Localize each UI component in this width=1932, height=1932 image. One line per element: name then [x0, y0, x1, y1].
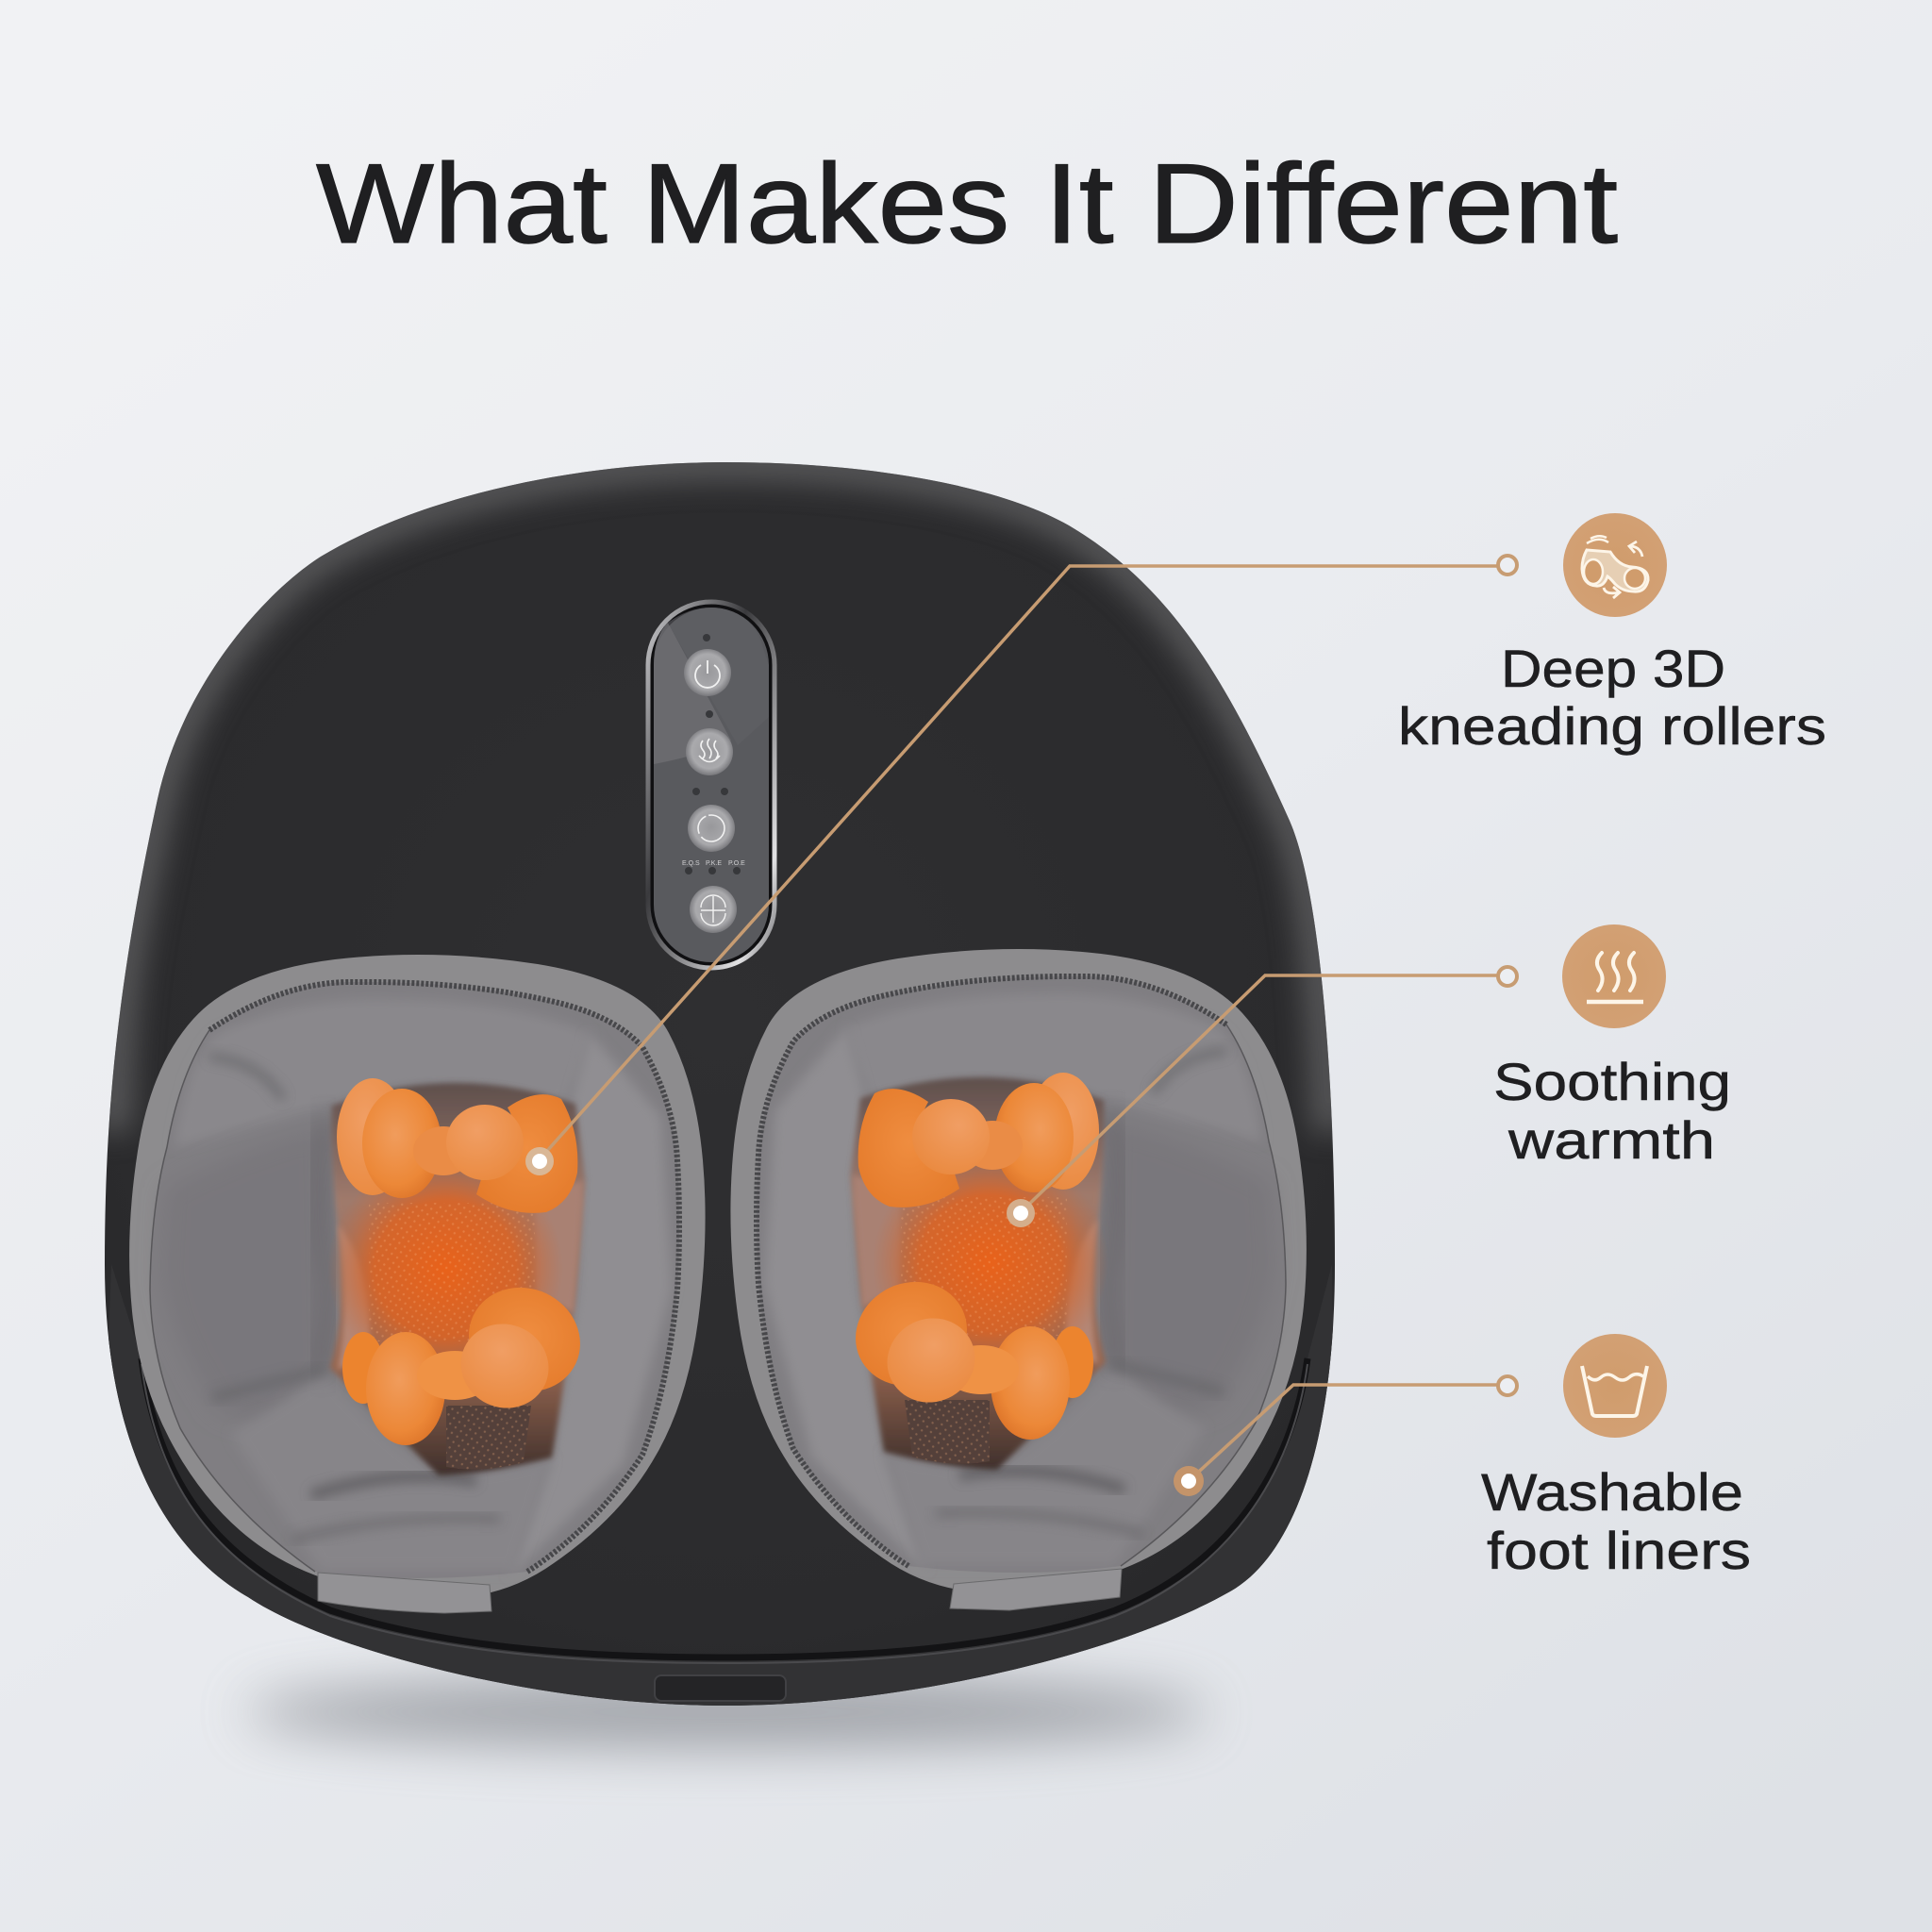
feature: rollers: kneading rollers: [1398, 696, 1826, 756]
left foot well: [129, 955, 706, 1599]
zipper: [209, 982, 679, 1572]
feature: warmth: warmth: [1507, 1110, 1715, 1170]
lower roller: [342, 1270, 597, 1445]
feature: washable liners: [1481, 1334, 1751, 1580]
massager body: [94, 462, 1340, 1717]
control panel: [648, 602, 774, 968]
mode button: [688, 805, 735, 852]
indicator lights: [685, 634, 741, 874]
tiny mode labels: P.O.E: [728, 860, 745, 867]
icon: 3D roller: [1563, 513, 1667, 617]
outer rim: [129, 955, 706, 1599]
bottom button: [655, 1675, 786, 1701]
label: Soothing: [1493, 1052, 1731, 1111]
feature: warmth: [1493, 924, 1731, 1170]
tiny mode labels: P.K.E: [706, 860, 722, 867]
tiny mode labels: E.Q.S: [682, 860, 700, 867]
power button: [684, 649, 731, 696]
callout line: rollers: [525, 556, 1517, 1175]
feature: washable liners: foot liners: [1487, 1521, 1751, 1580]
heat button: [686, 728, 733, 775]
callout line: liners: [1174, 1376, 1517, 1496]
ground shadow: [245, 1676, 1208, 1748]
upper roller: [337, 1078, 577, 1213]
icon: wash basin: [1563, 1334, 1667, 1438]
label: Washable: [1481, 1462, 1743, 1522]
label: Deep 3D: [1501, 639, 1725, 698]
left carry tab: [318, 1573, 491, 1613]
right carry tab: [950, 1569, 1122, 1610]
thin seam: [150, 1030, 315, 1572]
right foot well: [730, 949, 1307, 1593]
callout line: warmth: [1007, 967, 1517, 1227]
heated cavity: [327, 1083, 585, 1475]
feature: rollers: [1398, 513, 1826, 756]
tiny mode labels: [682, 860, 745, 867]
fabric liner with folds: [150, 982, 679, 1578]
title: What Makes It Different: [316, 141, 1618, 267]
product: foot massager: [94, 462, 1340, 1748]
intensity button: [690, 886, 737, 933]
icon: heat waves: [1562, 924, 1666, 1028]
